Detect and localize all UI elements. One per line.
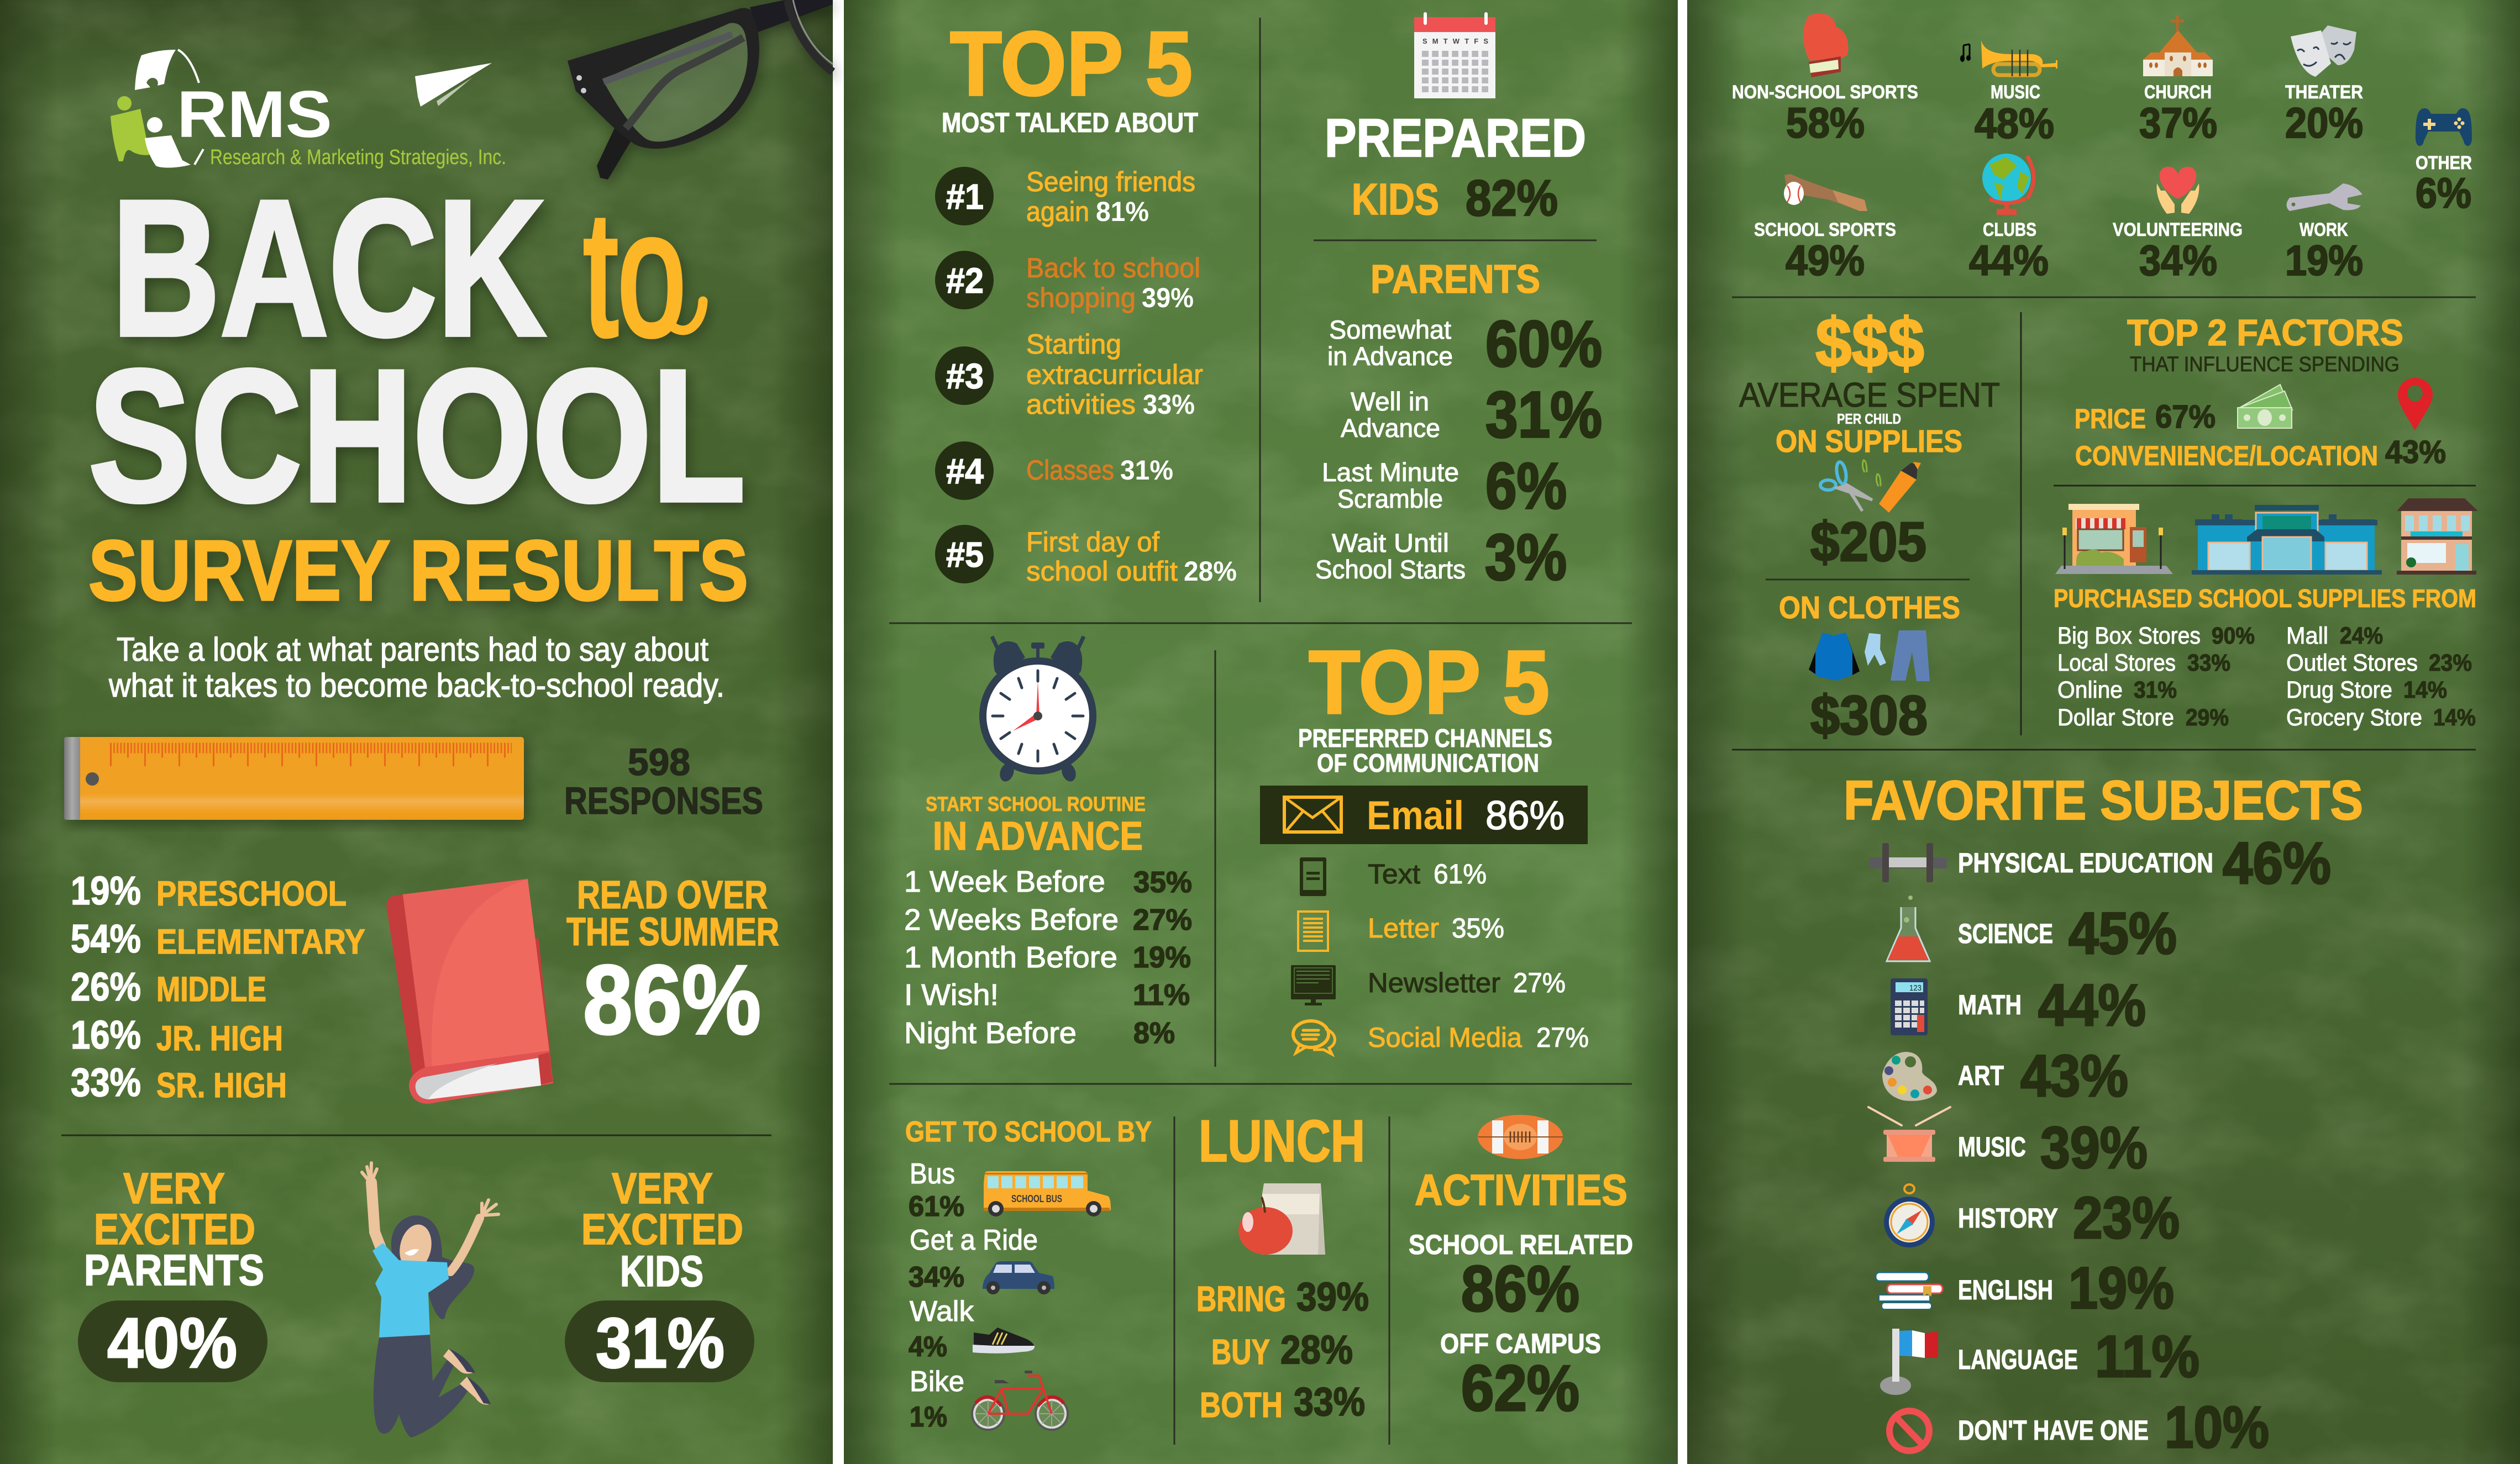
title: Back to School bbox=[88, 160, 748, 618]
subject: art bbox=[1882, 1042, 2128, 1109]
icon: football bbox=[1478, 1115, 1563, 1159]
activity: music: 48% bbox=[1975, 100, 2054, 148]
activity: music bbox=[1960, 40, 2057, 148]
row: bus bbox=[909, 1158, 1111, 1223]
list: grade levels: PRESCHOOL bbox=[156, 875, 347, 913]
stat: very excited parents: VERY bbox=[123, 1163, 225, 1213]
list: store types: Grocery Store bbox=[2286, 704, 2422, 731]
stat: read over the summer: READ OVER bbox=[577, 873, 768, 917]
subject: language: 11% bbox=[2095, 1323, 2199, 1389]
activity: volunteering: 34% bbox=[2139, 237, 2217, 285]
icon: storefront bbox=[2055, 504, 2173, 574]
stat: very excited kids: 31% bbox=[596, 1304, 725, 1383]
stat: read over the summer: THE SUMMER bbox=[566, 910, 779, 954]
ranked item 2: Back to school bbox=[1026, 252, 1200, 283]
row: walk: Walk bbox=[910, 1296, 974, 1328]
activity: church bbox=[2139, 15, 2217, 147]
ranked item 1: Seeing friends bbox=[1026, 166, 1195, 197]
stat: read over the summer bbox=[566, 873, 779, 1055]
row: bike: Bike bbox=[910, 1366, 964, 1398]
stat: very excited kids bbox=[565, 1163, 754, 1383]
row: letter bbox=[1298, 912, 1504, 951]
stats: activities bbox=[1409, 1165, 1633, 1424]
row: email highlighted: 86% bbox=[1485, 793, 1565, 838]
ranked item 1: 81% bbox=[1096, 196, 1149, 227]
subject: music: MUSIC bbox=[1958, 1131, 2026, 1162]
ranked item 5: 28% bbox=[1184, 556, 1237, 587]
list: parents preparedness bbox=[1315, 308, 1602, 594]
subject: physical education bbox=[1869, 830, 2331, 896]
activity: clubs bbox=[1969, 154, 2049, 285]
title: Back to School: SCHOOL bbox=[88, 331, 746, 541]
ranked item 5 bbox=[935, 525, 1237, 587]
factor: location: CONVENIENCE/LOCATION bbox=[2075, 440, 2378, 471]
list: school routine timing: 19% bbox=[1133, 941, 1191, 974]
row: social media bbox=[1293, 1021, 1589, 1054]
activity: volunteering bbox=[2113, 167, 2243, 285]
illustration: jumping woman bbox=[362, 1163, 498, 1437]
list: lunch: BOTH bbox=[1200, 1385, 1283, 1425]
list: store types: Outlet Stores bbox=[2286, 650, 2418, 676]
list: store types bbox=[2057, 623, 2476, 731]
ranked item 4: #4 bbox=[946, 451, 984, 491]
panel: chalkboard right bbox=[1687, 0, 2520, 1464]
stats: activities: OFF CAMPUS bbox=[1440, 1328, 1601, 1359]
list: parents preparedness: Scramble bbox=[1337, 484, 1443, 513]
icon: big box store bbox=[2192, 505, 2382, 575]
list: grade levels: MIDDLE bbox=[156, 970, 266, 1009]
list: lunch: BUY bbox=[1211, 1332, 1270, 1372]
list: grade levels bbox=[71, 869, 365, 1105]
list: parents preparedness: Advance bbox=[1341, 413, 1440, 443]
spending: average spent heading bbox=[1739, 304, 2000, 427]
list: parents preparedness: 6% bbox=[1485, 450, 1567, 523]
subject: physical education: PHYSICAL EDUCATION bbox=[1958, 847, 2213, 878]
heading: prepared bbox=[1325, 108, 1586, 227]
activity: other: 6% bbox=[2416, 170, 2471, 217]
list: school routine timing bbox=[904, 865, 1192, 1050]
list: store types: 90% bbox=[2212, 623, 2255, 649]
list: parents preparedness: Last Minute bbox=[1322, 457, 1459, 487]
list: grade levels: 19% bbox=[71, 869, 141, 913]
ranked item 3: #3 bbox=[946, 356, 984, 396]
icon: lunch bag and apple bbox=[1238, 1183, 1325, 1255]
title: Back to School: SURVEY RESULTS bbox=[88, 523, 748, 618]
heading: top 5 preferred channels: PREFERRED CHANNELS bbox=[1298, 724, 1552, 752]
stats: activities: 62% bbox=[1461, 1352, 1579, 1424]
activity: theater: 20% bbox=[2285, 99, 2363, 147]
stat: very excited parents: PARENTS bbox=[84, 1245, 264, 1294]
heading: prepared: KIDS bbox=[1352, 175, 1439, 224]
list: store types: 33% bbox=[2187, 650, 2230, 676]
subject: english: ENGLISH bbox=[1958, 1275, 2053, 1305]
spending: on supplies bbox=[1776, 424, 1962, 573]
list: store types: 23% bbox=[2429, 650, 2472, 676]
stats: activities: SCHOOL RELATED bbox=[1409, 1229, 1633, 1260]
logo: RMS Research & Marketing Strategies: RMS bbox=[177, 77, 332, 151]
heading: get to school by: GET TO SCHOOL BY bbox=[905, 1116, 1152, 1148]
stat: very excited kids: KIDS bbox=[620, 1246, 704, 1296]
list: store types: 31% bbox=[2134, 677, 2177, 703]
icon: mall building bbox=[2397, 498, 2478, 575]
subject: history bbox=[1884, 1184, 2180, 1251]
row: email highlighted bbox=[1260, 786, 1588, 844]
row: newsletter: Newsletter bbox=[1368, 967, 1500, 998]
subject: science: SCIENCE bbox=[1958, 918, 2053, 949]
row: ride bbox=[909, 1224, 1054, 1294]
list: grade levels: SR. HIGH bbox=[156, 1066, 287, 1105]
heading: top 2 factors: TOP 2 FACTORS bbox=[2127, 312, 2403, 354]
stat: 598 responses: RESPONSES bbox=[564, 780, 763, 822]
list: grade levels: 54% bbox=[71, 917, 141, 961]
list: store types: 29% bbox=[2186, 704, 2229, 731]
list: store types: 14% bbox=[2433, 704, 2476, 731]
logo: RMS Research & Marketing Strategies: Research & Marketing Strategies, Inc. bbox=[210, 146, 506, 169]
list: lunch bbox=[1196, 1275, 1369, 1425]
ranked item 1 bbox=[935, 166, 1195, 227]
list: lunch: 28% bbox=[1280, 1328, 1353, 1372]
activity: work: WORK bbox=[2300, 219, 2348, 240]
list: parents preparedness: Well in bbox=[1351, 387, 1429, 416]
list: school routine timing: 2 Weeks Before bbox=[904, 903, 1119, 936]
list: store types: Online bbox=[2057, 677, 2123, 703]
heading: top 2 factors: THAT INFLUENCE SPENDING bbox=[2130, 353, 2400, 376]
list: parents preparedness: 31% bbox=[1485, 378, 1602, 451]
activity: church: CHURCH bbox=[2144, 82, 2212, 103]
list: school routine timing: 11% bbox=[1133, 978, 1190, 1012]
subject: math bbox=[1891, 972, 2146, 1038]
list: parents preparedness: Somewhat bbox=[1329, 315, 1451, 344]
subject: none: 10% bbox=[2165, 1394, 2269, 1460]
subject: art: 43% bbox=[2020, 1042, 2128, 1109]
factor: location bbox=[2075, 378, 2446, 471]
activity: non-school sports: 58% bbox=[1786, 99, 1865, 147]
heading: start school routine in advance: IN ADVANCE bbox=[933, 814, 1143, 859]
stat: very excited parents bbox=[78, 1163, 267, 1383]
activity: non-school sports: NON-SCHOOL SPORTS bbox=[1732, 82, 1918, 103]
activity: other: OTHER bbox=[2416, 152, 2472, 173]
subject: music: 39% bbox=[2040, 1114, 2148, 1181]
list: grade levels: ELEMENTARY bbox=[156, 923, 365, 961]
row: bus: Bus bbox=[910, 1158, 955, 1190]
row: letter: 35% bbox=[1452, 913, 1504, 944]
factor: price: 67% bbox=[2155, 399, 2216, 435]
row: newsletter: 27% bbox=[1513, 967, 1566, 998]
factor: price: PRICE bbox=[2075, 403, 2146, 434]
subject: none bbox=[1889, 1394, 2269, 1460]
ranked item 2: 39% bbox=[1142, 282, 1194, 313]
list: store types: Dollar Store bbox=[2057, 704, 2174, 731]
subject: science: 45% bbox=[2068, 900, 2177, 966]
spending: on supplies: ON SUPPLIES bbox=[1776, 424, 1962, 459]
heading: prepared: PREPARED bbox=[1325, 108, 1586, 168]
heading: top 5 most talked about: MOST TALKED ABOUT bbox=[942, 107, 1198, 138]
heading: prepared: 82% bbox=[1466, 170, 1558, 227]
activity: school sports bbox=[1754, 174, 1896, 285]
list: store types: 24% bbox=[2340, 623, 2383, 649]
subject: none: DON'T HAVE ONE bbox=[1958, 1415, 2149, 1446]
subject: art: ART bbox=[1958, 1060, 2004, 1091]
list: school routine timing: 1 Week Before bbox=[904, 865, 1105, 898]
subject: math: 123 bbox=[1909, 983, 1922, 993]
activity: other bbox=[2416, 108, 2472, 217]
list: lunch: 39% bbox=[1296, 1275, 1369, 1319]
heading: top 2 factors bbox=[2127, 312, 2403, 376]
activity: theater bbox=[2285, 25, 2363, 147]
spending: on clothes: $308 bbox=[1810, 684, 1928, 746]
panel: chalkboard left bbox=[0, 0, 833, 1464]
activity: clubs: 44% bbox=[1969, 237, 2049, 285]
ranked item 5: school outfit bbox=[1026, 556, 1178, 587]
list: school routine timing: 35% bbox=[1133, 866, 1192, 899]
ranked item 2: #2 bbox=[946, 261, 984, 301]
list: lunch: 33% bbox=[1294, 1380, 1365, 1424]
subject: physical education: 46% bbox=[2223, 830, 2331, 896]
list: school routine timing: 8% bbox=[1133, 1017, 1175, 1050]
subject: history: HISTORY bbox=[1958, 1203, 2058, 1234]
list: store types: Big Box Stores bbox=[2057, 623, 2201, 649]
heading: favorite subjects: FAVORITE SUBJECTS bbox=[1844, 770, 2363, 831]
heading: top 5 preferred channels: OF COMMUNICATION bbox=[1317, 749, 1539, 777]
subject: language bbox=[1880, 1323, 2199, 1395]
row: bus: 61% bbox=[909, 1191, 964, 1223]
ranked item 2 bbox=[935, 251, 1200, 313]
list: parents preparedness: 60% bbox=[1485, 308, 1602, 381]
icon: glasses bbox=[568, 0, 833, 180]
activity: non-school sports bbox=[1732, 13, 1918, 147]
row: ride: 34% bbox=[909, 1261, 964, 1293]
stat: very excited kids: VERY bbox=[612, 1163, 713, 1213]
row: text bbox=[1300, 857, 1487, 896]
heading: top 5 most talked about: TOP 5 bbox=[950, 13, 1193, 114]
ranked item 1: #1 bbox=[946, 177, 984, 217]
stat: 598 responses: 598 bbox=[628, 741, 690, 783]
activity: church: 37% bbox=[2139, 99, 2217, 147]
heading: parents: PARENTS bbox=[1371, 257, 1540, 302]
spending: average spent heading: $$$ bbox=[1815, 304, 1924, 382]
heading: start school routine in advance bbox=[926, 793, 1146, 859]
row: bike bbox=[910, 1366, 1068, 1433]
list: grade levels: JR. HIGH bbox=[156, 1019, 283, 1058]
list: parents preparedness: Wait Until bbox=[1332, 528, 1449, 557]
list: school routine timing: I Wish! bbox=[904, 978, 999, 1012]
list: school routine timing: 1 Month Before bbox=[904, 941, 1117, 974]
row: social media: Social Media bbox=[1368, 1022, 1522, 1053]
ranked item 3: extracurricular bbox=[1026, 359, 1203, 390]
row: bus: SCHOOL BUS bbox=[1011, 1193, 1062, 1204]
ranked item 3: Starting bbox=[1026, 329, 1121, 360]
spending: average spent heading: PER CHILD bbox=[1837, 410, 1901, 427]
list: parents preparedness: 3% bbox=[1485, 521, 1567, 594]
activity: school sports: 49% bbox=[1786, 237, 1865, 285]
intro text: Take a look at what parents had to say about bbox=[117, 631, 708, 668]
icon: calendar: S M T W T F S bbox=[1422, 37, 1488, 45]
ranked item 3: activities bbox=[1026, 389, 1136, 420]
subject: english: 19% bbox=[2068, 1255, 2174, 1321]
ranked item 4: 31% bbox=[1120, 455, 1173, 486]
activity: music: MUSIC bbox=[1991, 82, 2040, 103]
ranked item 3: 33% bbox=[1143, 389, 1195, 420]
list: store types: Drug Store bbox=[2286, 677, 2392, 703]
icon: alarm clock bbox=[979, 636, 1096, 783]
ranked item 5: First day of bbox=[1026, 526, 1159, 557]
list: school routine timing: Night Before bbox=[904, 1017, 1077, 1050]
intro text bbox=[108, 631, 725, 704]
row: letter: Letter bbox=[1368, 913, 1439, 944]
list: store types: 14% bbox=[2403, 677, 2447, 703]
title: Back to School: BACK bbox=[112, 160, 545, 376]
row: email highlighted: Email bbox=[1367, 793, 1464, 838]
subject: music bbox=[1868, 1107, 2148, 1181]
row: bike: 1% bbox=[910, 1401, 947, 1433]
ranked item 3 bbox=[935, 329, 1203, 420]
icon: calendar bbox=[1414, 12, 1495, 98]
stat: 598 responses bbox=[564, 741, 763, 822]
ranked item 4 bbox=[935, 441, 1173, 500]
subject: language: LANGUAGE bbox=[1958, 1344, 2078, 1375]
subject: english bbox=[1876, 1255, 2174, 1321]
spending: on clothes bbox=[1779, 590, 1960, 746]
row: walk: 4% bbox=[909, 1331, 947, 1363]
factor: location: 43% bbox=[2385, 434, 2446, 470]
row: walk bbox=[909, 1296, 1035, 1363]
spending: on supplies: $205 bbox=[1810, 511, 1926, 573]
factor: price bbox=[2075, 385, 2292, 435]
stat: very excited parents: 40% bbox=[107, 1304, 237, 1383]
list: lunch: BRING bbox=[1196, 1279, 1286, 1319]
stat: very excited parents: EXCITED bbox=[94, 1204, 255, 1254]
activity: volunteering: VOLUNTEERING bbox=[2113, 219, 2243, 240]
activity: theater: THEATER bbox=[2285, 82, 2363, 103]
stat: very excited kids: EXCITED bbox=[581, 1204, 743, 1254]
subject: science bbox=[1887, 896, 2177, 966]
row: text: Text bbox=[1368, 859, 1420, 889]
heading: lunch: LUNCH bbox=[1199, 1108, 1365, 1174]
intro text: what it takes to become back-to-school ready. bbox=[108, 667, 725, 704]
stats: activities: 86% bbox=[1461, 1252, 1579, 1325]
icon: red book bbox=[386, 879, 553, 1104]
spending: on clothes: ON CLOTHES bbox=[1779, 590, 1960, 625]
spending: average spent heading: AVERAGE SPENT bbox=[1739, 376, 2000, 414]
subject: math: MATH bbox=[1958, 989, 2022, 1020]
heading: top 5 preferred channels bbox=[1298, 631, 1552, 777]
row: text: 61% bbox=[1434, 859, 1487, 889]
subject: math: 44% bbox=[2038, 972, 2146, 1038]
heading: start school routine in advance: START SCHOOL ROUTINE bbox=[926, 793, 1146, 815]
row: ride: Get a Ride bbox=[910, 1224, 1038, 1256]
ranked item 1: again bbox=[1026, 196, 1089, 227]
list: store types: Mall bbox=[2286, 623, 2328, 649]
heading: top 5 preferred channels: TOP 5 bbox=[1309, 631, 1550, 733]
activity: school sports: SCHOOL SPORTS bbox=[1754, 219, 1896, 240]
list: store types: Local Stores bbox=[2057, 650, 2176, 676]
activity: work bbox=[2285, 183, 2363, 285]
list: parents preparedness: School Starts bbox=[1315, 555, 1466, 584]
list: parents preparedness: in Advance bbox=[1327, 341, 1453, 371]
subject: history: 23% bbox=[2073, 1184, 2180, 1251]
ranked item 2: shopping bbox=[1026, 282, 1136, 313]
list: grade levels: 33% bbox=[71, 1061, 141, 1105]
row: newsletter bbox=[1291, 965, 1566, 1005]
ranked item 5: #5 bbox=[946, 535, 984, 575]
activity: clubs: CLUBS bbox=[1983, 219, 2036, 240]
row: social media: 27% bbox=[1536, 1022, 1589, 1053]
list: school routine timing: 27% bbox=[1133, 903, 1192, 936]
list: grade levels: 16% bbox=[71, 1013, 141, 1057]
stat: read over the summer: 86% bbox=[583, 945, 761, 1055]
icon: ruler bbox=[64, 737, 524, 820]
activity: work: 19% bbox=[2285, 237, 2363, 285]
stats: activities: ACTIVITIES bbox=[1415, 1165, 1628, 1214]
ranked item 4: Classes bbox=[1026, 455, 1114, 486]
icon: paper plane bbox=[415, 63, 492, 107]
logo: RMS Research & Marketing Strategies bbox=[111, 50, 506, 169]
title: Back to School: to bbox=[584, 175, 686, 372]
panel: chalkboard middle bbox=[844, 0, 1678, 1464]
list: grade levels: 26% bbox=[71, 965, 141, 1009]
